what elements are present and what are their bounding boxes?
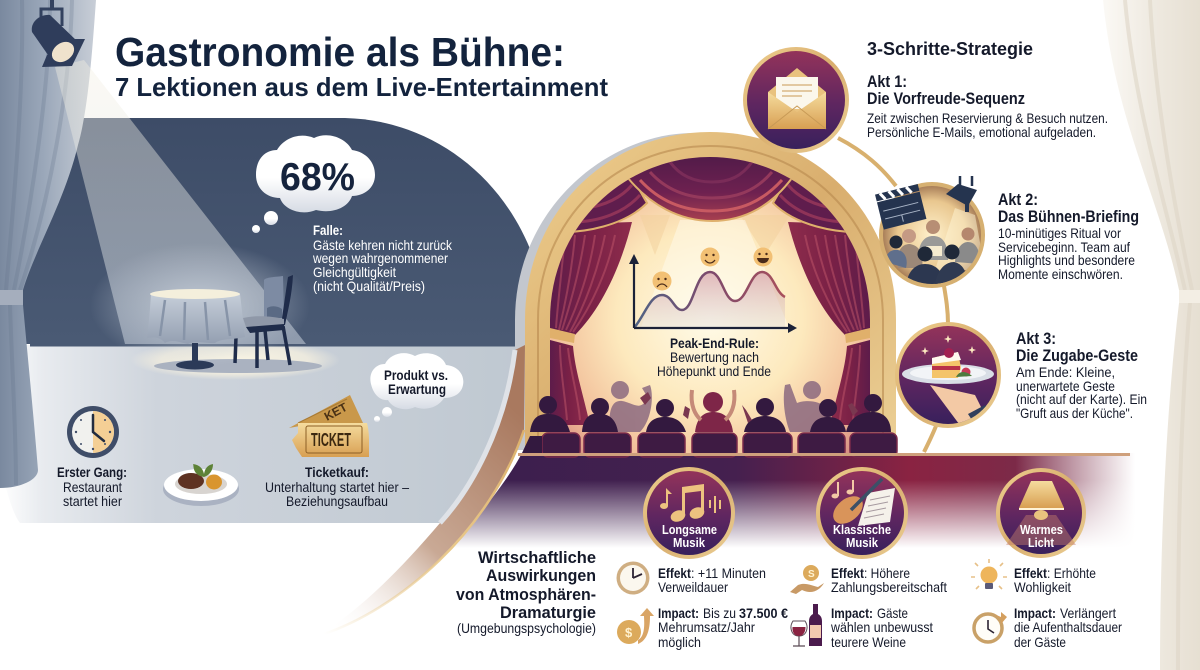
thought cloud: 68%	[252, 135, 375, 233]
icon: coin with arrow	[617, 608, 654, 644]
icon: ticket	[289, 395, 369, 457]
audience	[522, 381, 897, 457]
text: Warmes Licht effect: Effekt	[1014, 565, 1047, 581]
text: Longsame Musik impact: Mehrumsatz/Jahr	[658, 619, 755, 635]
thought cloud: Produkt vs. Erwartung: Erwartung	[388, 381, 446, 397]
badge: Warmes Licht: Warmes	[1020, 523, 1063, 537]
stage light	[946, 176, 977, 212]
text: Akt 1: Die Vorfreude-Sequenz	[867, 90, 1025, 108]
text: Falle: Gäste kehren nicht zurück	[313, 237, 453, 253]
text: Longsame Musik effect: Effekt	[658, 565, 691, 581]
center figure with raised hands	[692, 390, 734, 432]
burgundy stage band	[440, 453, 1140, 548]
text: Akt 1: Zeit zwischen Reservierung & Besuch nutzen.	[867, 110, 1108, 126]
seats	[542, 433, 897, 457]
thought cloud: Produkt vs. Erwartung: Produkt vs.	[384, 367, 448, 383]
text: Longsame Musik impact: möglich	[658, 634, 701, 650]
text: Peak-End-Rule: Höhepunkt und Ende	[657, 363, 771, 379]
peak-end-rule chart	[629, 248, 797, 333]
badge: Longsame Musik: Musik	[673, 536, 705, 550]
icon: act 3 dessert plate	[895, 322, 1001, 428]
icon: ticket: KET	[322, 400, 350, 424]
text: Ticketkauf: Ticketkauf:	[305, 464, 369, 480]
text: Longsame Musik effect: Verweildauer	[658, 579, 728, 595]
figure 68%: 68%	[280, 156, 355, 199]
icon: light bulb	[971, 559, 1007, 589]
text: Akt 3: "Gruft aus der Küche".	[1016, 405, 1133, 421]
clapperboard	[875, 184, 926, 230]
spotlight beam	[55, 60, 306, 344]
text: Longsame Musik effect: : +11 Minuten	[691, 565, 766, 581]
icon: act 2 team briefing	[875, 176, 985, 290]
text: Ticketkauf	[265, 464, 409, 509]
raised lighter figures	[610, 381, 830, 432]
heading: Wirtschaftliche Auswirkungen: Auswirkungen	[486, 566, 596, 585]
text: Erster Gang	[57, 464, 127, 509]
right curtain	[1103, 0, 1200, 670]
badge: Klassische Musik	[816, 467, 908, 559]
floor panel	[0, 340, 525, 523]
heading: Wirtschaftliche Auswirkungen: Wirtschaftliche	[478, 548, 596, 567]
icon: clock with arrow	[974, 612, 1007, 642]
left drape	[550, 222, 632, 425]
table glow	[90, 243, 310, 367]
icon: lamp	[1006, 481, 1076, 545]
text: Akt 3: (nicht auf der Karte). Ein	[1016, 391, 1147, 407]
seated silhouettes	[530, 392, 891, 432]
text: Erster Gang: Erster Gang:	[57, 464, 127, 480]
title: Gastronomie als Bühne:	[115, 29, 565, 75]
heading: Wirtschaftliche Auswirkungen: (Umgebungspsychologie)	[457, 620, 596, 636]
text: Akt 2: 10-minütiges Ritual vor	[998, 225, 1121, 241]
text: Longsame Musik impact: Bis zu	[703, 605, 736, 621]
text: Akt 1: Persönliche E-Mails, emotional aufgeladen.	[867, 124, 1096, 140]
text: Klassische Musik impact: wählen unbewusst	[830, 619, 933, 635]
text: Warmes Licht impact: Verlängert	[1060, 605, 1116, 621]
side swags	[574, 177, 648, 233]
emoji: smile	[700, 248, 720, 266]
text: Erster Gang: Restaurant	[63, 479, 122, 495]
text: Klassische Musik impact: Impact:	[831, 605, 873, 621]
text: Warmes Licht impact: die Aufenthaltsdauer	[1014, 619, 1122, 635]
text: Warmes Licht effect: Wohligkeit	[1014, 579, 1071, 595]
text: Klassische Musik effect: Effekt	[831, 565, 864, 581]
heading: 3-Schritte-Strategie: 3-Schritte-Strategie	[867, 39, 1033, 59]
emoji: sad	[652, 272, 672, 290]
text: Akt 2	[998, 191, 1139, 282]
text: Akt 2: Akt 2:	[998, 191, 1038, 209]
text: Warmes Licht impact: der Gäste	[1014, 634, 1066, 650]
subtitle: 7 Lektionen aus dem Live-Entertainment	[115, 72, 608, 102]
icon: hand with coin	[790, 565, 824, 594]
text: Warmes Licht effect: : Erhöhte	[1047, 565, 1096, 581]
icon: clock	[67, 406, 119, 458]
text: Peak-End-Rule: Bewertung nach	[670, 349, 759, 365]
badge: Longsame Musik: Longsame	[662, 523, 717, 537]
heading: Wirtschaftliche Auswirkungen: Dramaturgie	[500, 603, 596, 622]
text: Falle: Falle:	[313, 222, 343, 238]
heading: Wirtschaftliche Auswirkungen: von Atmosphären-	[456, 585, 596, 604]
text: Akt 3: Akt 3:	[1016, 330, 1056, 348]
icon: violin and sheet music	[828, 479, 895, 529]
text: Falle	[312, 222, 453, 294]
connector path	[838, 138, 948, 452]
icon: music notes	[660, 484, 721, 524]
text: Ticketkauf: Unterhaltung startet hier –	[265, 479, 409, 495]
badge: Warmes Licht	[996, 468, 1086, 558]
stage backdrop	[550, 150, 870, 455]
badge: Klassische Musik: Klassische	[833, 523, 891, 537]
chair	[235, 275, 293, 368]
text: Akt 3: unerwartete Geste	[1016, 378, 1115, 394]
text: Longsame Musik impact: Impact:	[658, 605, 699, 621]
text: Akt 1	[867, 73, 1108, 140]
text: Akt 1: Akt 1:	[867, 73, 907, 91]
text: Erster Gang: startet hier	[63, 493, 122, 509]
text: Akt 3	[1016, 330, 1147, 421]
heading: Wirtschaftliche Auswirkungen	[456, 548, 596, 636]
dark stage panel	[0, 118, 535, 344]
text: Klassische Musik impact: Gäste	[877, 605, 908, 621]
ticket label: TICKET	[311, 430, 351, 450]
table	[147, 289, 245, 370]
text: Longsame Musik impact: 37.500 €	[739, 605, 788, 621]
icon: act 1 envelope	[743, 47, 849, 153]
text: Falle: Gleichgültigkeit	[313, 264, 396, 280]
text: Ticketkauf: Beziehungsaufbau	[286, 493, 388, 509]
text: Falle: (nicht Qualität/Preis)	[313, 278, 425, 294]
icon: wine glass and bottle	[791, 604, 822, 646]
icon: plate with food	[163, 464, 239, 506]
gold swoosh	[318, 345, 525, 636]
text: Klassische Musik effect: Zahlungsbereitschaft	[831, 579, 947, 595]
badge: Warmes Licht: Licht	[1028, 536, 1055, 550]
stage arch	[515, 132, 896, 455]
emoji: laugh	[754, 248, 772, 266]
text: Akt 2: Highlights und besondere	[998, 252, 1135, 268]
spotlight lamp	[32, 0, 85, 67]
icon: coin with arrow: $	[625, 625, 633, 640]
right drape	[788, 222, 870, 425]
text: Peak-End-Rule	[657, 335, 771, 379]
valance	[628, 150, 792, 221]
text: Akt 2: Momente einschwören.	[998, 266, 1123, 282]
text: Klassische Musik effect: : Höhere	[864, 565, 910, 581]
text: Akt 3: Am Ende: Kleine,	[1016, 364, 1115, 380]
icon: hand with coin: S	[808, 569, 815, 580]
empty table and chair	[147, 275, 293, 370]
icon: clock, dwell time	[616, 562, 650, 594]
arch frame	[515, 132, 896, 455]
left curtain	[0, 0, 96, 488]
text: Akt 3: Die Zugabe-Geste	[1016, 347, 1138, 365]
text: Akt 2: Servicebeginn. Team auf	[998, 239, 1130, 255]
text: Akt 2: Das Bühnen-Briefing	[998, 208, 1139, 226]
badge: Klassische Musik: Musik	[846, 536, 878, 550]
text: Warmes Licht impact: Impact:	[1014, 605, 1056, 621]
badge: Longsame Musik	[643, 467, 735, 559]
text: Klassische Musik impact: teurere Weine	[831, 634, 906, 650]
text: Falle: wegen wahrgenommener	[312, 250, 448, 266]
text: Peak-End-Rule: Peak-End-Rule:	[670, 335, 759, 351]
thought cloud: Produkt vs. Erwartung	[370, 353, 463, 422]
gold stage line	[518, 453, 1130, 456]
